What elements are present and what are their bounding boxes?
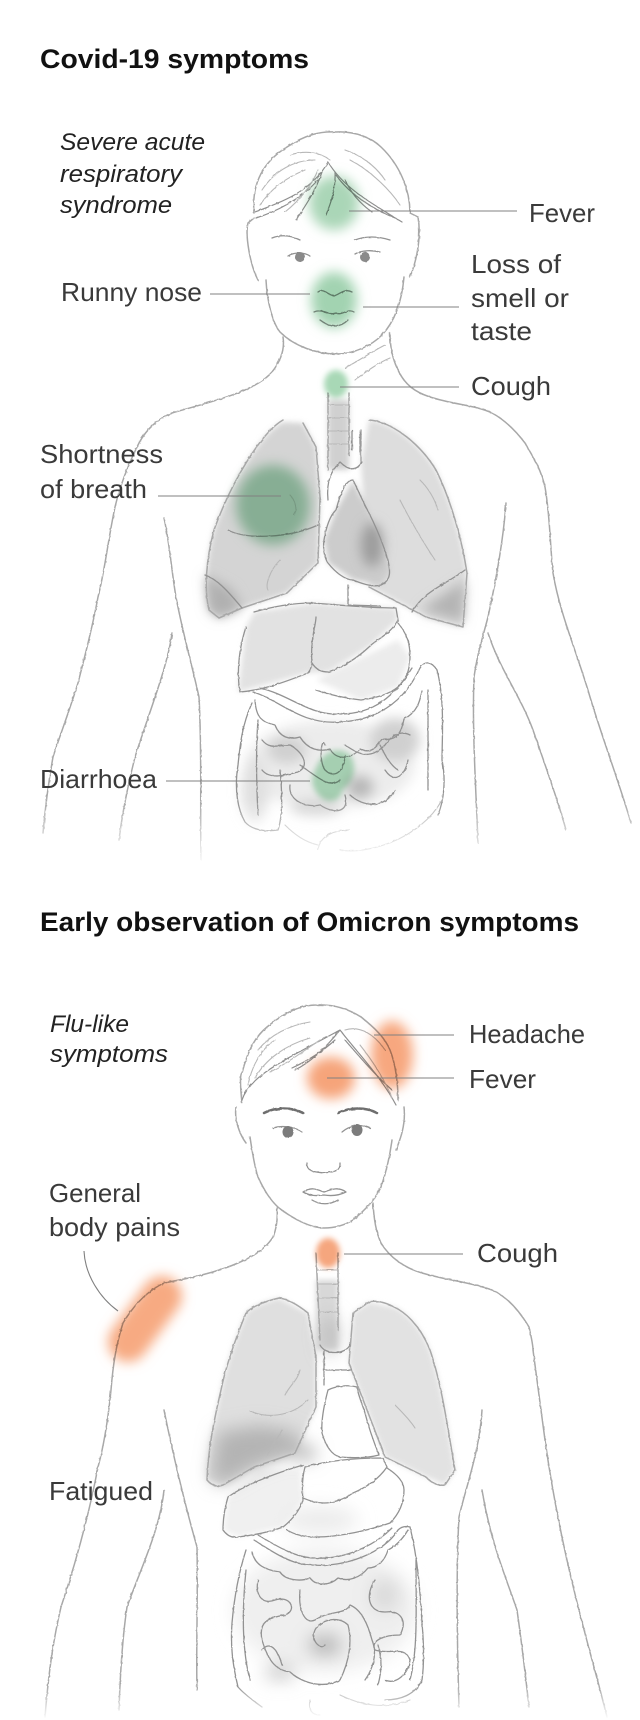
text: Flu-like symptoms: Flu-like — [50, 1011, 129, 1038]
label: Cough: Cough — [477, 1238, 558, 1268]
label: Shortness of breath: of breath — [40, 474, 147, 504]
trachea and heart — [316, 1253, 338, 1340]
label: Loss of smell or taste: Loss of — [471, 249, 562, 279]
hair strands — [242, 1030, 396, 1105]
label: General body pains: body pains — [49, 1212, 180, 1242]
label: Fatigued: Fatigued — [49, 1476, 153, 1506]
text: Severe acute respiratory syndrome — [60, 129, 205, 219]
highlight: nose and mouth — [311, 272, 357, 328]
liver and stomach — [223, 1458, 387, 1537]
label: Fever: Fever — [469, 1064, 536, 1094]
colon and intestines — [253, 663, 437, 722]
label: Loss of smell or taste: smell or — [471, 283, 569, 313]
lungs outline — [206, 420, 320, 618]
organ shading — [205, 400, 467, 824]
label: Diarrhoea: Diarrhoea — [40, 764, 158, 794]
organ shading — [207, 1280, 455, 1680]
colon and intestines — [254, 1526, 410, 1565]
text: Flu-like symptoms: symptoms — [50, 1041, 168, 1068]
highlight: shoulder — [128, 1296, 162, 1342]
label: Cough: Cough — [471, 371, 551, 401]
highlight: throat — [316, 1238, 340, 1268]
text: Flu-like symptoms — [50, 1011, 168, 1068]
trachea and heart — [328, 393, 349, 470]
label: Headache: Headache — [469, 1019, 585, 1049]
liver and stomach — [238, 603, 398, 692]
face features — [264, 1108, 303, 1113]
figure: Omicron body illustration — [0, 1005, 640, 1720]
hair strands — [255, 162, 402, 222]
fade out bottom of body — [0, 1685, 640, 1720]
highlight: intestine — [312, 750, 354, 801]
body outline — [45, 1005, 607, 1717]
label: Shortness of breath — [40, 439, 281, 504]
label: General body pains: General — [49, 1178, 141, 1208]
figure: Covid-19 body illustration — [0, 132, 640, 868]
label: Fever: Fever — [529, 198, 595, 228]
face features — [272, 236, 390, 240]
heading: Early observation of Omicron symptoms: Early observation of Omicron symptoms — [40, 907, 579, 937]
fade out bottom of body — [0, 800, 640, 868]
highlight: lung — [236, 465, 310, 545]
text: Severe acute respiratory syndrome: respiratory — [60, 161, 184, 188]
green highlights — [236, 176, 359, 801]
highlight: throat — [324, 370, 348, 398]
body outline — [43, 132, 631, 860]
heading: Covid-19 symptoms: Covid-19 symptoms — [40, 44, 309, 74]
orange highlights — [128, 1021, 413, 1342]
label: Loss of smell or taste — [363, 249, 569, 346]
text: Severe acute respiratory syndrome: Severe acute — [60, 129, 205, 156]
highlight: headache — [371, 1021, 413, 1089]
lungs outline — [207, 1298, 316, 1486]
label: Loss of smell or taste: taste — [471, 316, 532, 346]
label: Shortness of breath: Shortness — [40, 439, 163, 469]
label: Runny nose: Runny nose — [61, 277, 202, 307]
text: Severe acute respiratory syndrome: syndrome — [60, 192, 172, 219]
highlight: forehead — [307, 1057, 355, 1099]
label: General body pains — [49, 1178, 180, 1311]
highlight: forehead — [309, 176, 359, 230]
